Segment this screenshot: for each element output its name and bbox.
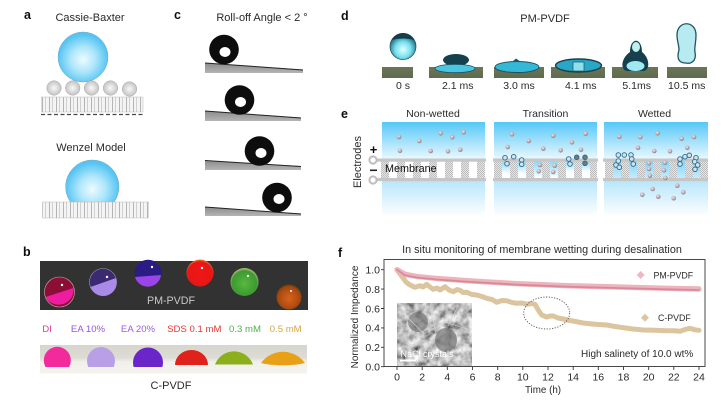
stage: Wetted bbox=[603, 108, 708, 215]
axis title: Electrodes: Electrodes bbox=[352, 136, 364, 188]
frame 4 bbox=[205, 183, 301, 216]
legend: liquids: 0.5 mM bbox=[270, 324, 302, 335]
label e: e bbox=[341, 107, 348, 121]
C-PVDF photo bbox=[40, 345, 307, 374]
series: C-PVDF bbox=[397, 270, 699, 331]
legend: PM-PVDF bbox=[637, 270, 694, 280]
time labels: 4.1 ms bbox=[565, 80, 596, 92]
caption C-PVDF: C-PVDF bbox=[151, 380, 192, 392]
x axis labels: 4 bbox=[444, 372, 450, 384]
callout: dotted ellipse bbox=[524, 297, 570, 329]
Wenzel membrane bbox=[42, 202, 148, 218]
frame 3.0 ms bbox=[494, 58, 544, 78]
inset: SEM image: NaCl crystals bbox=[400, 349, 454, 359]
frame 4.1 ms bbox=[551, 59, 605, 78]
label: Membrane: Membrane bbox=[385, 163, 437, 175]
legend: PM-PVDF: PM-PVDF bbox=[654, 270, 694, 280]
electrodes: + bbox=[370, 142, 378, 157]
frame 2.1 ms bbox=[429, 54, 483, 78]
PM-PVDF photo bbox=[40, 260, 308, 310]
y axis labels: 0.6 bbox=[365, 303, 380, 315]
time labels: 10.5 ms bbox=[668, 80, 705, 92]
x axis labels: 8 bbox=[495, 372, 501, 384]
panel b: droplet photographs bbox=[23, 245, 308, 392]
x axis labels bbox=[394, 372, 705, 384]
frame 5.1 ms bbox=[612, 41, 658, 78]
label a: a bbox=[24, 8, 32, 22]
x axis labels: 6 bbox=[470, 372, 476, 384]
y axis labels: 1.0 bbox=[365, 264, 380, 276]
x axis title: Time (h) bbox=[525, 385, 561, 396]
label c: c bbox=[174, 8, 181, 22]
stage: Non-wetted bbox=[376, 108, 486, 215]
icon: Cassie-Baxter droplet bbox=[58, 32, 108, 82]
axes bbox=[381, 260, 705, 370]
legend: liquids: DI bbox=[42, 324, 52, 335]
panel d: droplet bounce sequence bbox=[341, 9, 707, 92]
y axis labels: 0.0 bbox=[365, 362, 380, 374]
heading: Wenzel Model: Wenzel Model bbox=[56, 142, 126, 154]
stage: Transition bbox=[493, 108, 598, 215]
y axis title: Normalized Impedance bbox=[350, 265, 361, 368]
x axis labels: 24 bbox=[693, 372, 705, 384]
Cassie membrane bbox=[41, 97, 143, 114]
y axis labels: 0.2 bbox=[365, 342, 380, 354]
legend: C-PVDF: C-PVDF bbox=[658, 313, 691, 323]
x axis labels: 22 bbox=[668, 372, 680, 384]
time labels: 2.1 ms bbox=[442, 80, 473, 92]
caption PM-PVDF: PM-PVDF bbox=[147, 295, 196, 307]
x axis labels: 16 bbox=[592, 372, 604, 384]
x axis labels: 2 bbox=[419, 372, 425, 384]
chart title: In situ monitoring of membrane wetting during desalination bbox=[402, 244, 682, 256]
x axis labels: 12 bbox=[542, 372, 554, 384]
x axis labels: 10 bbox=[517, 372, 529, 384]
stage: Transition: Transition bbox=[523, 108, 569, 120]
legend: liquids: 0.3 mM bbox=[229, 324, 261, 335]
time labels: 0 s bbox=[396, 80, 410, 92]
heading: PM-PVDF: PM-PVDF bbox=[520, 13, 570, 25]
x axis labels: 20 bbox=[643, 372, 655, 384]
y axis labels: 0.4 bbox=[365, 323, 380, 335]
legend: liquids bbox=[42, 324, 302, 335]
y axis labels bbox=[365, 264, 380, 374]
heading: roll-off angle: Roll-off Angle < 2 ° bbox=[216, 12, 308, 24]
electrodes bbox=[369, 142, 378, 184]
heading: Cassie-Baxter: Cassie-Baxter bbox=[55, 12, 125, 24]
x axis labels: 14 bbox=[567, 372, 579, 384]
legend: C-PVDF bbox=[641, 313, 691, 323]
panel e: wetting stages bbox=[341, 107, 708, 215]
label d: d bbox=[341, 9, 349, 23]
frame 0 s bbox=[382, 33, 416, 78]
panel f: impedance chart bbox=[338, 244, 705, 396]
series: PM-PVDF bbox=[397, 270, 699, 290]
stage: Wetted: Wetted bbox=[638, 108, 671, 120]
x axis labels: 18 bbox=[618, 372, 629, 384]
time labels bbox=[396, 80, 705, 92]
y axis labels: 0.8 bbox=[365, 284, 380, 296]
panel a: wetting models bbox=[24, 8, 148, 218]
frame 2 bbox=[205, 85, 301, 121]
frame 1 bbox=[205, 35, 303, 73]
legend: liquids: EA 20% bbox=[121, 324, 156, 335]
inset: SEM image bbox=[397, 303, 472, 366]
frame 10.5 ms bbox=[667, 24, 707, 78]
stage: Non-wetted: Non-wetted bbox=[406, 108, 460, 120]
label f: f bbox=[338, 246, 343, 260]
air pockets bbox=[47, 81, 137, 96]
time labels: 3.0 ms bbox=[503, 80, 535, 92]
annotation: salinity: High salinety of 10.0 wt% bbox=[581, 349, 693, 360]
time labels: 5.1ms bbox=[622, 80, 651, 92]
icon: Wenzel droplet bbox=[65, 160, 120, 202]
x axis labels: 0 bbox=[394, 372, 400, 384]
frame 3 bbox=[205, 136, 301, 170]
legend: liquids: SDS 0.1 mM bbox=[167, 324, 221, 335]
label b: b bbox=[23, 245, 31, 259]
panel c: roll-off sequence bbox=[174, 8, 308, 216]
legend: liquids: EA 10% bbox=[71, 324, 106, 335]
